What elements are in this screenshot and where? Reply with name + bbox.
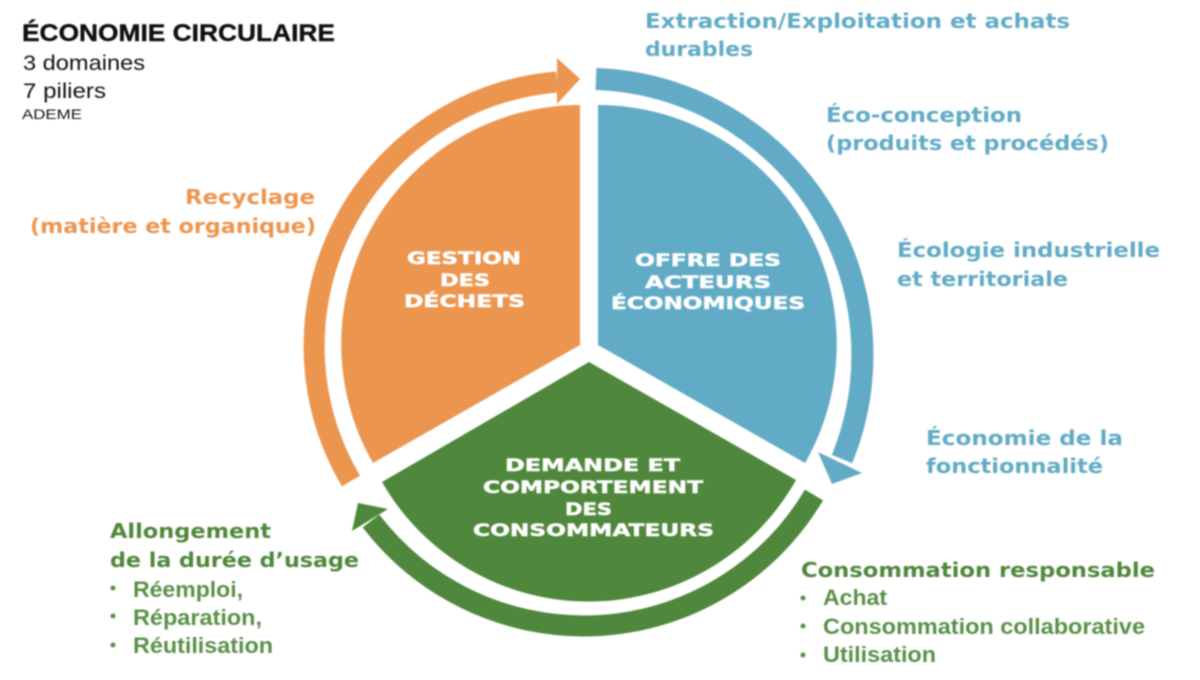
label: extraction: Extraction/Exploitation et achats: [645, 9, 1070, 33]
label: recyclage: (matière et organique): [30, 214, 316, 238]
panel: gestion sector: DES: [440, 271, 490, 291]
label: ecologie industrielle: et territoriale: [897, 267, 1068, 291]
panel: offre sector: ÉCONOMIQUES: [611, 292, 805, 314]
label: economie de la fonctionnalite: [926, 426, 1123, 478]
panel: offre sector: [598, 105, 837, 463]
label: economie de la fonctionnalite: fonctionnalité: [926, 454, 1103, 478]
label: recyclage: [30, 185, 316, 238]
list: usage: Réutilisation: [133, 633, 273, 658]
subtitle: domains: 3 domaines: [23, 52, 145, 75]
label: consommation responsable: Consommation responsable: [801, 558, 1155, 582]
label: ecologie industrielle: [897, 238, 1160, 291]
label: allongement: Allongement: [110, 519, 271, 543]
label: allongement: de la durée d’usage: [110, 548, 359, 572]
panel: gestion sector: DÉCHETS: [404, 290, 525, 312]
list: consommation: Consommation collaborative: [823, 614, 1145, 639]
arrow: orange: [314, 58, 580, 481]
panel: demande sector: [382, 362, 796, 602]
label: recyclage: Recyclage: [185, 185, 315, 209]
arrow: blue: [596, 79, 862, 484]
panel: gestion sector: GESTION: [407, 249, 521, 269]
label: eco-conception: [826, 103, 1109, 155]
arrow: green: [352, 495, 814, 626]
label: allongement: [110, 519, 359, 658]
source: ADEME: [22, 106, 82, 122]
label: eco-conception: (produits et procédés): [826, 131, 1109, 155]
label: eco-conception: Éco-conception: [826, 103, 1022, 127]
label: economie de la fonctionnalite: Économie de la: [926, 426, 1123, 450]
panel: demande sector: DEMANDE ET: [505, 456, 681, 476]
list: consommation: [800, 585, 1145, 667]
list: usage: Réparation,: [133, 605, 262, 630]
label: extraction: durables: [645, 37, 753, 61]
panel: gestion sector: [341, 105, 580, 463]
list: usage: Réemploi,: [133, 577, 243, 602]
title: ÉCONOMIE CIRCULAIRE: [22, 19, 335, 47]
label: extraction: [645, 9, 1070, 61]
list: consommation: Achat: [823, 585, 888, 610]
list: usage: [110, 577, 273, 658]
panel: demande sector: COMPORTEMENT: [483, 478, 704, 498]
panel: demande sector: CONSOMMATEURS: [473, 521, 714, 541]
list: consommation: Utilisation: [823, 642, 936, 667]
panel: demande sector: DES: [565, 500, 612, 520]
label: ecologie industrielle: Écologie industrielle: [897, 238, 1160, 262]
panel: offre sector: OFFRE DES: [635, 251, 781, 271]
title block: [22, 19, 335, 122]
subtitle: pillars: 7 piliers: [23, 80, 106, 103]
panel: offre sector: ACTEURS: [645, 273, 771, 293]
label: consommation responsable: [800, 558, 1155, 667]
